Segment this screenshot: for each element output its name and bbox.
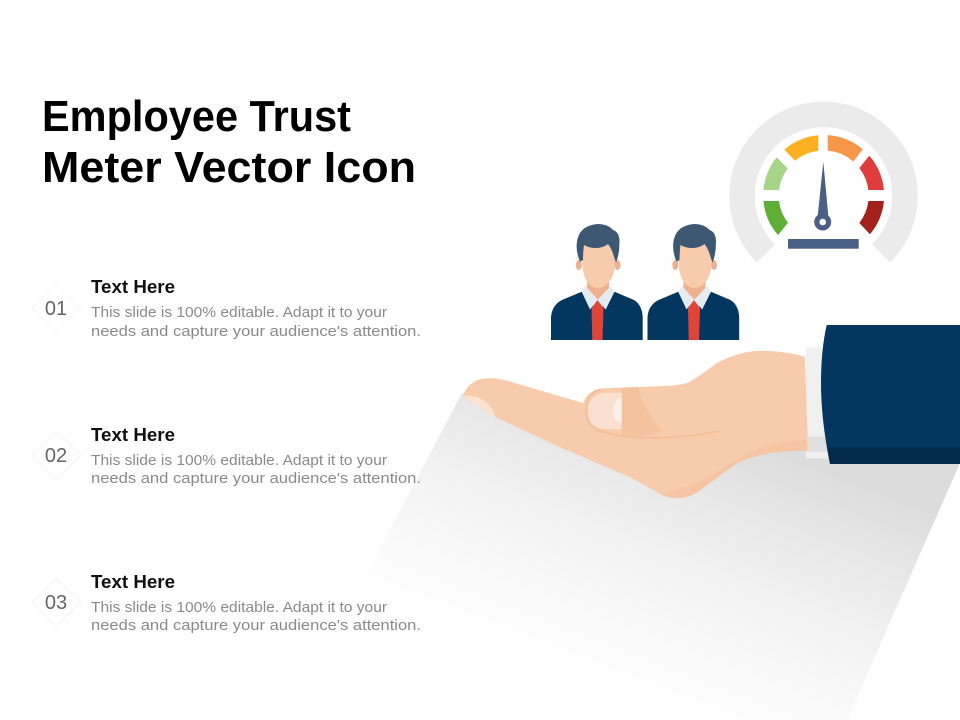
- gauge base bar: [788, 239, 859, 249]
- list item 01: [32, 277, 421, 340]
- body text 01: [91, 305, 421, 340]
- tie: [688, 300, 700, 340]
- thumb nail: [588, 393, 622, 429]
- body text 01: needs and capture your audience's attention.: [91, 324, 421, 340]
- list item 03: [32, 572, 421, 634]
- number badge 03: 03: [45, 592, 67, 614]
- number badge 01: 01: [45, 298, 67, 320]
- title: Employee Trust: [42, 92, 351, 141]
- body text 02: [91, 453, 421, 487]
- list item 02: [32, 425, 421, 487]
- title: [42, 92, 416, 192]
- hair: [577, 224, 620, 263]
- lower palm shading: [662, 440, 808, 498]
- gauge outer ring: [742, 114, 905, 254]
- suit: [551, 292, 643, 340]
- number badge 01: [32, 284, 81, 332]
- icon: trust meter gauge: [742, 114, 905, 254]
- suit sleeve: [821, 325, 960, 464]
- fingertip: [463, 396, 495, 417]
- tie: [592, 300, 604, 340]
- face: [679, 240, 712, 288]
- number badge 02: 02: [45, 445, 67, 467]
- icon: open hand with sleeve: [463, 325, 960, 498]
- palm and finger: [463, 351, 808, 498]
- body text 03: [91, 600, 421, 634]
- neck and ears: [576, 260, 620, 300]
- heading 01: Text Here: [91, 277, 175, 297]
- thumb shading: [622, 387, 662, 438]
- number badge 02: [32, 431, 81, 479]
- number badge 03: [32, 578, 81, 626]
- gauge needle: [814, 162, 831, 230]
- shirt cuff: [806, 347, 830, 458]
- body text 02: This slide is 100% editable. Adapt it to your: [91, 453, 387, 469]
- gauge colour segments: [763, 135, 884, 235]
- icon: employee left: [551, 224, 643, 340]
- heading 03: Text Here: [91, 572, 175, 592]
- neck and ears: [672, 260, 717, 300]
- heading 02: Text Here: [91, 425, 175, 445]
- body text 01: This slide is 100% editable. Adapt it to your: [91, 305, 387, 321]
- hand shadow: [290, 393, 960, 720]
- icon: employee right: [648, 224, 739, 340]
- suit: [648, 292, 739, 340]
- face: [582, 240, 615, 288]
- hair: [673, 224, 716, 263]
- collar: [678, 286, 711, 310]
- body text 03: This slide is 100% editable. Adapt it to your: [91, 600, 387, 616]
- body text 03: needs and capture your audience's attention.: [91, 618, 421, 634]
- body text 02: needs and capture your audience's attention.: [91, 471, 421, 487]
- thumb crease: [586, 390, 718, 438]
- collar: [582, 286, 614, 310]
- title: Meter Vector Icon: [42, 143, 416, 192]
